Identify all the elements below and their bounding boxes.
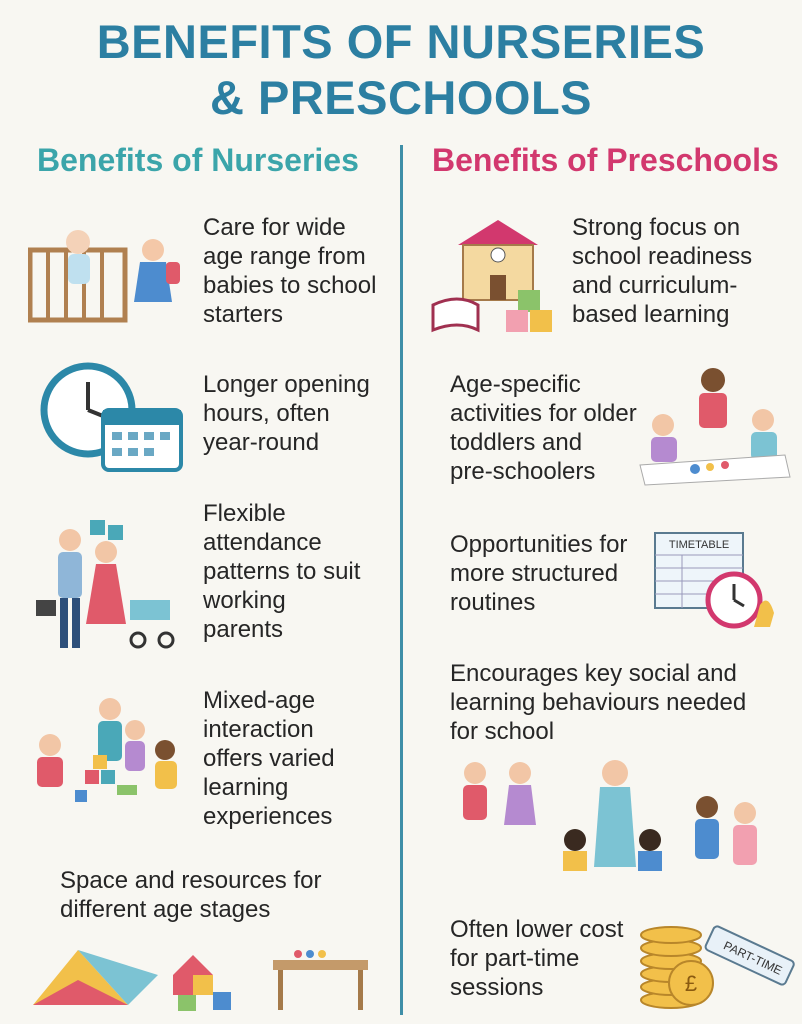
icon: timetable and alarm clock: [654, 532, 774, 628]
text: nursery 3: [203, 500, 360, 643]
text: nursery 3: Flexible: [203, 500, 286, 527]
icon: children playing with blocks: [37, 698, 177, 802]
text: nursery 4: Mixed-age: [203, 687, 315, 714]
text: nursery 4: experiences: [203, 803, 332, 830]
text: preschool 2: pre-schoolers: [450, 458, 595, 485]
icon: crib and child: [28, 230, 180, 322]
text: preschool 2: toddlers and: [450, 429, 582, 456]
text: preschool 1: school readiness: [572, 243, 752, 270]
text: nursery 2: hours, often: [203, 400, 330, 427]
text: nursery 5: Space and resources for: [60, 867, 321, 894]
icon: coins and part-time tag: PART-TIME: [721, 938, 784, 978]
text: nursery 2: [203, 371, 370, 456]
text: nursery 4: offers varied: [203, 745, 335, 772]
icon: timetable and alarm clock: TIMETABLE: [669, 539, 729, 551]
text: preschool 4: Encourages key social and: [450, 660, 737, 687]
text: nursery 3: attendance: [203, 529, 322, 556]
text: preschool 4: [450, 660, 746, 745]
title: & PRESCHOOLS: [210, 71, 592, 124]
text: nursery 4: interaction: [203, 716, 314, 743]
text: nursery 5: different age stages: [60, 896, 270, 923]
icon: teacher and children: [463, 760, 757, 871]
text: preschool 3: routines: [450, 589, 535, 616]
text: preschool 1: Strong focus on: [572, 214, 740, 241]
text: nursery 5: [60, 867, 322, 923]
text: nursery 3: patterns to suit: [203, 558, 360, 585]
text: nursery 1: babies to school: [203, 272, 376, 299]
title: [97, 15, 705, 124]
text: nursery 4: learning: [203, 774, 288, 801]
text: nursery 1: [203, 214, 376, 328]
icon: coins and part-time tag: [640, 925, 795, 1009]
title: BENEFITS OF NURSERIES: [97, 15, 705, 68]
text: preschool 3: Opportunities for: [450, 531, 627, 558]
heading: preschools: Benefits of Preschools: [432, 142, 779, 178]
icon: school and ABC blocks: [432, 220, 552, 332]
text: nursery 4: [203, 687, 335, 830]
text: nursery 3: parents: [203, 616, 283, 643]
text: preschool 2: activities for older: [450, 400, 637, 427]
icon: soft play, blocks, art table: [33, 950, 368, 1011]
text: preschool 3: more structured: [450, 560, 618, 587]
text: nursery 3: working: [203, 587, 286, 614]
text: preschool 5: sessions: [450, 974, 543, 1001]
icon: parents with pram: [36, 520, 174, 648]
text: preschool 5: for part-time: [450, 945, 579, 972]
text: preschool 1: [572, 214, 752, 328]
text: nursery 1: starters: [203, 301, 283, 328]
icon: coins and part-time tag: £: [685, 971, 697, 996]
heading: nurseries: Benefits of Nurseries: [37, 142, 359, 178]
icon: children doing activity: [639, 368, 791, 486]
text: preschool 1: based learning: [572, 301, 729, 328]
icon: clock and calendar: [40, 362, 183, 472]
text: nursery 1: age range from: [203, 243, 366, 270]
text: preschool 4: for school: [450, 718, 554, 745]
text: preschool 5: Often lower cost: [450, 916, 623, 943]
text: preschool 4: learning behaviours needed: [450, 689, 746, 716]
text: nursery 2: Longer opening: [203, 371, 370, 398]
text: nursery 1: Care for wide: [203, 214, 346, 241]
text: preschool 3: [450, 531, 627, 616]
text: nursery 2: year-round: [203, 429, 319, 456]
text: preschool 1: and curriculum-: [572, 272, 737, 299]
text: preschool 2: Age-specific: [450, 371, 581, 398]
text: preschool 2: [450, 371, 637, 485]
text: preschool 5: [450, 916, 624, 1001]
